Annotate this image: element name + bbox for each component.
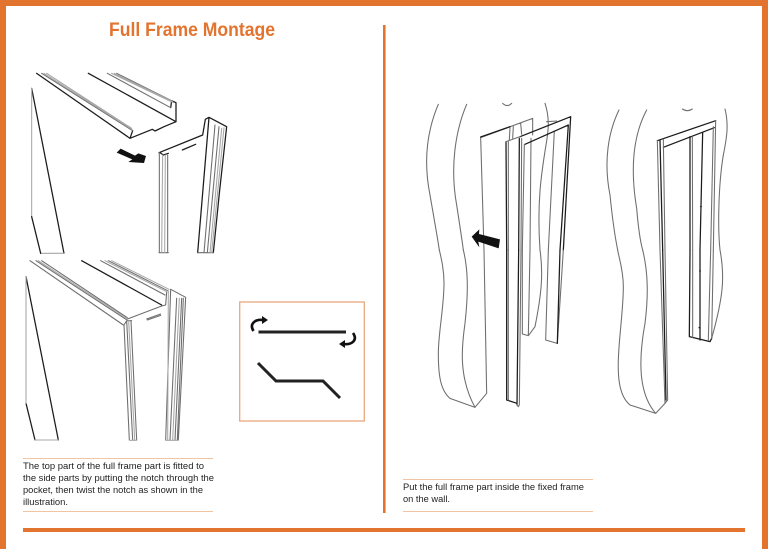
wall bottom	[438, 250, 563, 407]
screw	[700, 206, 702, 207]
illustration: rail fitted into side frame part	[26, 261, 186, 440]
moving frame	[506, 117, 571, 250]
fitted rail	[30, 261, 168, 325]
arrow	[472, 229, 500, 248]
wall curves	[607, 109, 727, 250]
notch before twist	[258, 330, 346, 334]
lower portion	[438, 250, 563, 407]
fixed frame	[481, 118, 554, 250]
illustration: frame part inserted into wall frame	[427, 103, 571, 407]
text block: left caption: pocket, then twist the notch as shown in the	[23, 485, 203, 496]
wall panel	[32, 88, 64, 253]
text block: right caption: Put the full frame part inside the fixed frame	[403, 482, 584, 493]
upper portion	[607, 109, 727, 250]
upper portion	[427, 103, 571, 250]
illustration: top rail above side frame part	[32, 73, 227, 253]
text block: left caption: the side parts by putting the notch through the	[23, 473, 214, 484]
door frame	[657, 121, 716, 250]
lower portion	[618, 250, 723, 413]
fitted side strips	[124, 289, 186, 440]
text block: left caption	[23, 458, 214, 512]
icon: twist arrow left	[252, 316, 268, 331]
wall curves	[427, 103, 548, 250]
illustration: frame in final position	[607, 109, 727, 413]
frame legs	[663, 250, 712, 400]
screws	[699, 270, 701, 272]
text block: right caption: on the wall.	[403, 494, 450, 505]
wall bottom	[618, 250, 723, 413]
icon: twist arrow right	[339, 333, 355, 348]
text block: left caption: The top part of the full frame part is fitted to	[23, 461, 204, 472]
title: Full Frame Montage	[109, 20, 275, 41]
notch after twist	[258, 363, 340, 398]
arrow	[117, 149, 146, 163]
frame legs	[507, 250, 560, 405]
text block: left caption: illustration.	[23, 497, 68, 508]
side frame part	[159, 117, 227, 253]
column divider	[383, 25, 386, 513]
bottom bar	[23, 528, 745, 532]
text block: right caption	[403, 480, 593, 512]
panel: twist notch detail	[240, 302, 364, 421]
wall panel	[26, 277, 58, 440]
detail box	[240, 302, 364, 421]
top rail	[37, 73, 176, 138]
